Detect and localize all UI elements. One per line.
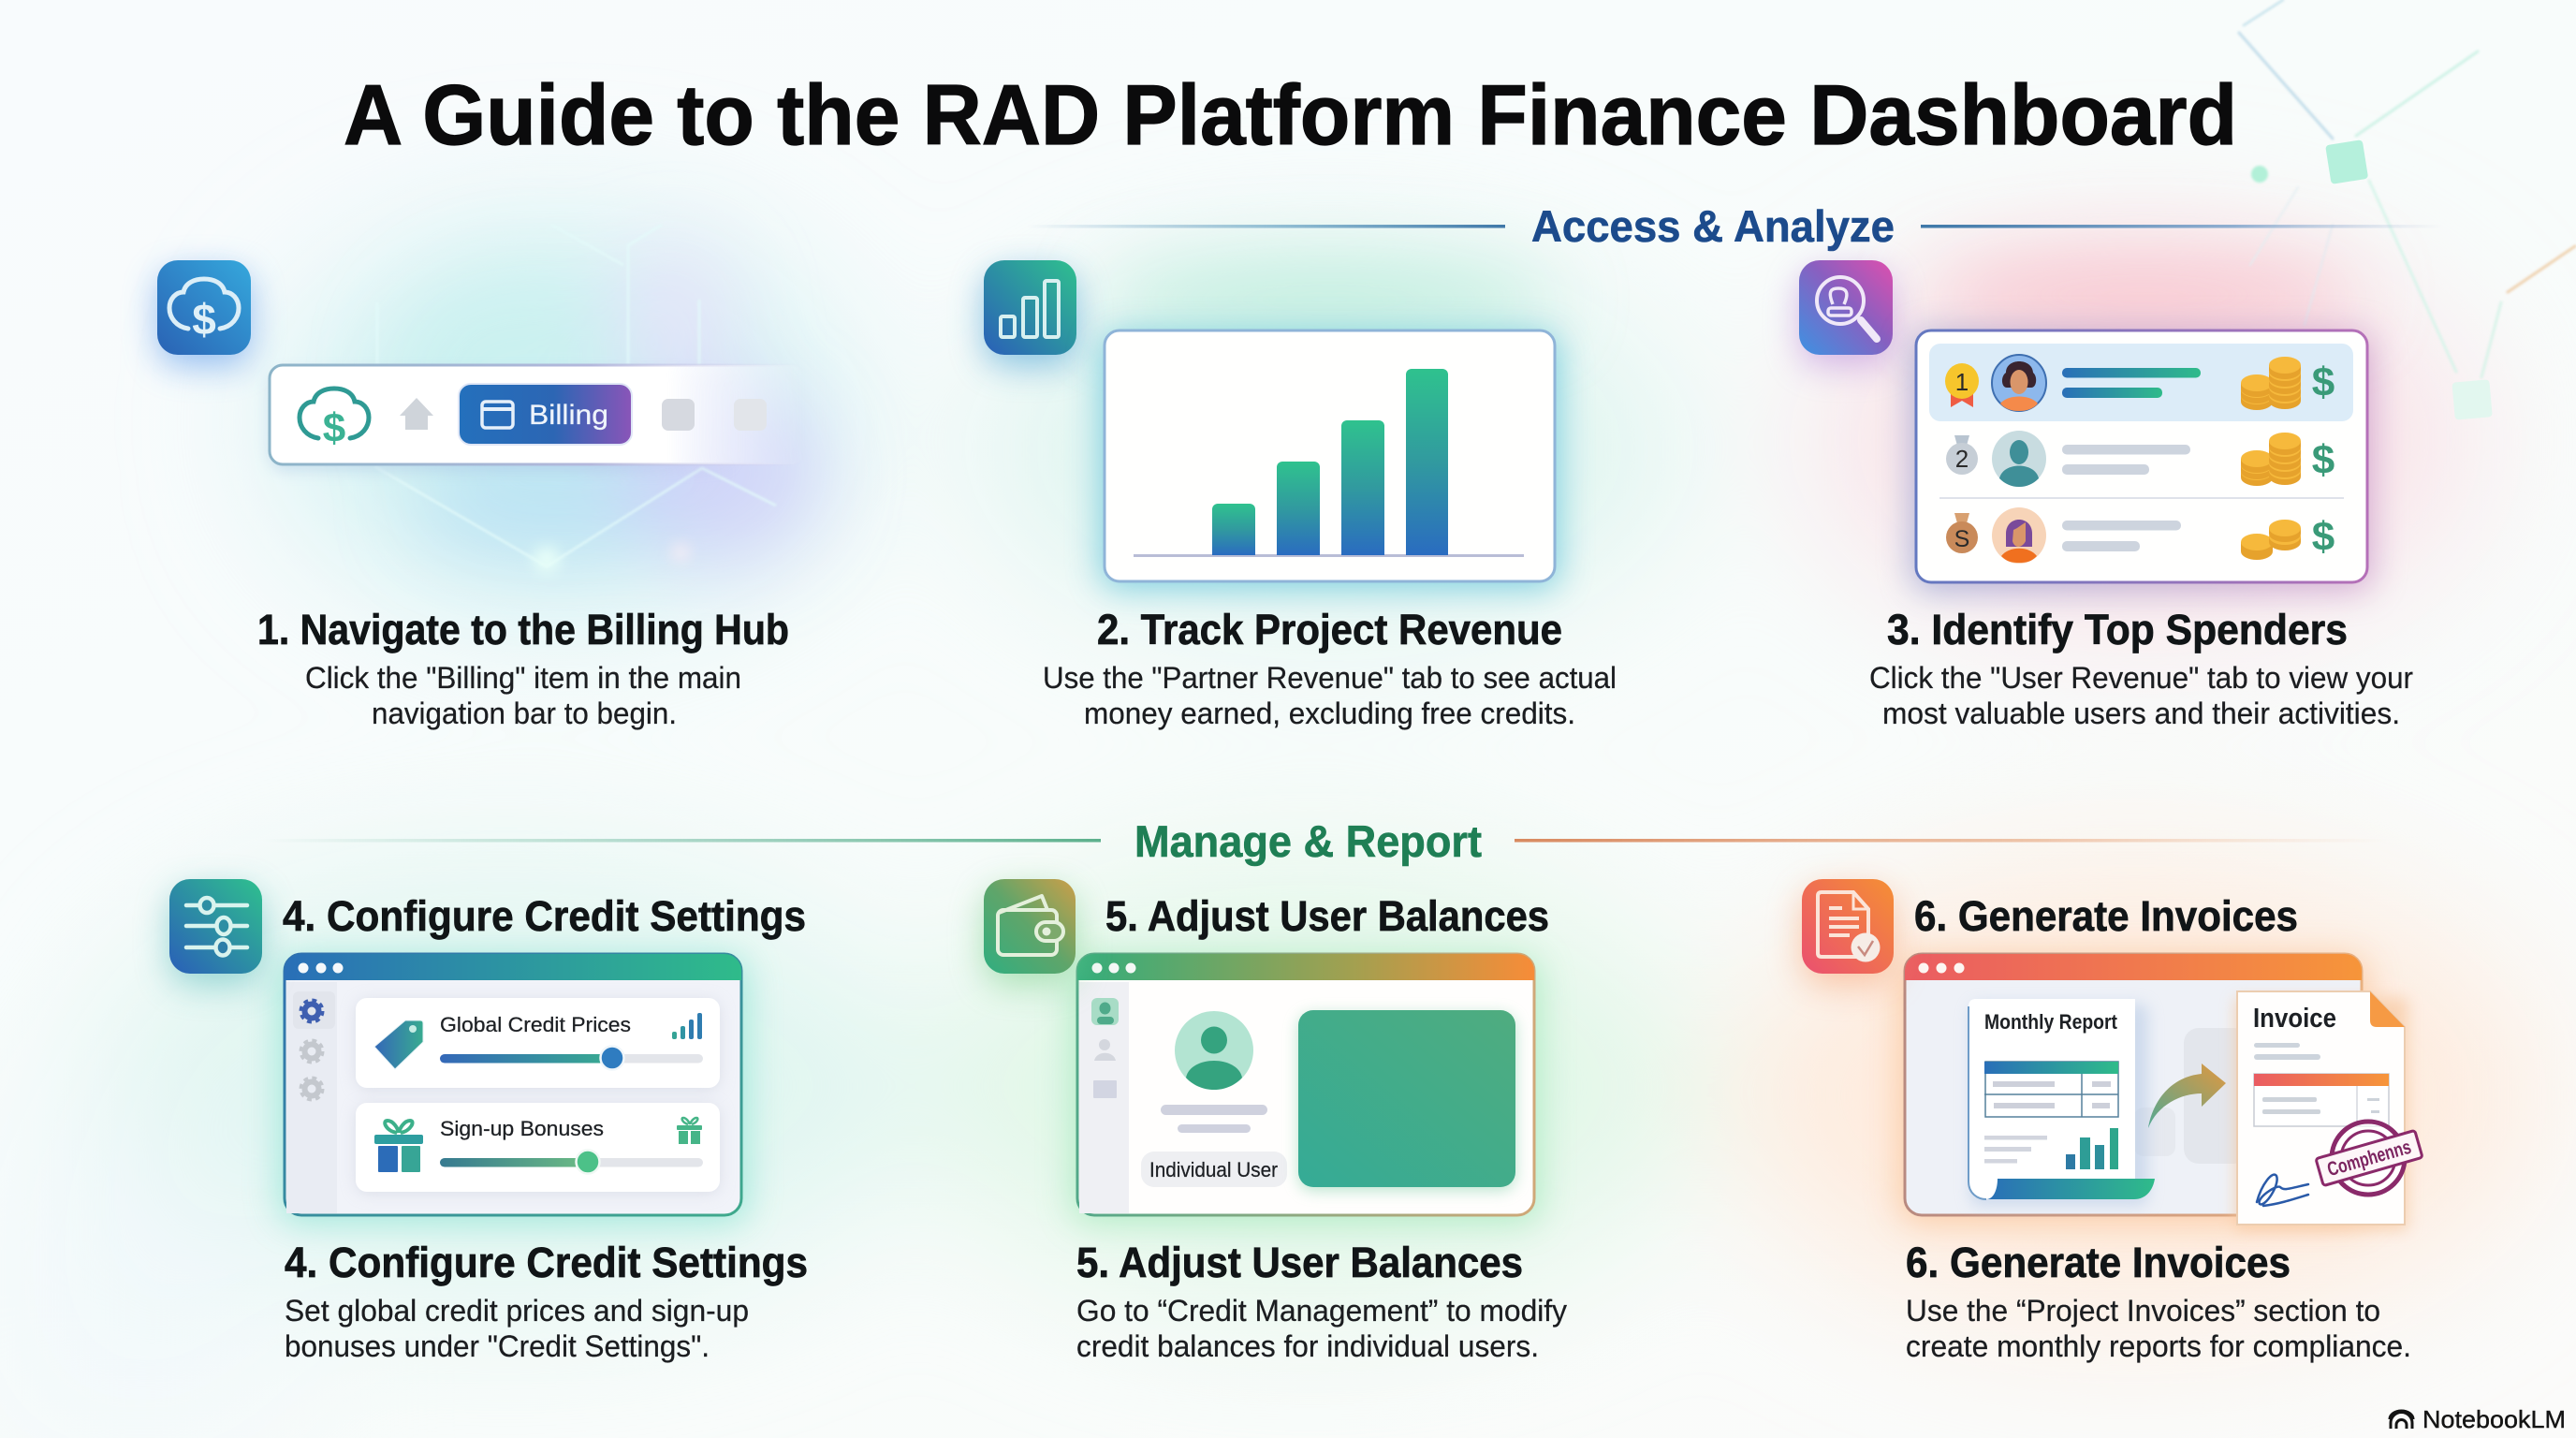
panel: step 6 generate invoices [1802, 879, 2422, 1363]
step 4 description: Set global credit prices and sign-up [285, 1294, 749, 1328]
nav placeholder items [662, 399, 767, 431]
step 2 description: money earned, excluding free credits. [1084, 697, 1575, 730]
sidebar gear icons [301, 1001, 322, 1099]
arrow [2148, 1064, 2226, 1128]
user leaderboard card [1912, 330, 2373, 591]
row 3 spender: S [1954, 526, 1969, 552]
step 1 description [305, 661, 741, 730]
step 6 description [1906, 1294, 2411, 1363]
icon: document check [1802, 879, 1894, 985]
row 2 spender: $ [2312, 437, 2334, 483]
navigation bar mock-up [270, 365, 805, 470]
step 6 heading: 6. Generate Invoices [1906, 1239, 2291, 1286]
step 2 description: Use the "Partner Revenue" tab to see actual [1043, 661, 1617, 695]
title: A Guide to the RAD Platform Finance Dashboard [344, 68, 2237, 163]
row 1 top spender: $ [2312, 360, 2334, 405]
row 1 top spender: 1 [1955, 368, 1969, 396]
step 4 top heading: 4. Configure Credit Settings [283, 892, 806, 940]
Monthly Report page: Monthly Report [1984, 1010, 2118, 1034]
step 6 top heading: 6. Generate Invoices [1914, 892, 2298, 940]
Invoice document [2235, 991, 2422, 1230]
step 6 description: Use the “Project Invoices” section to [1906, 1294, 2380, 1328]
step 5 description: Go to “Credit Management” to modify [1076, 1294, 1568, 1328]
compliance stamp: Comphenns [2325, 1137, 2414, 1181]
step 3 description [1869, 661, 2413, 730]
panel: step 2 track project revenue [984, 260, 1617, 730]
step 5 heading: 5. Adjust User Balances [1076, 1239, 1523, 1286]
step 1 description: Click the "Billing" item in the main [305, 661, 741, 695]
settings window mock-up [279, 954, 747, 1223]
icon: cloud dollar: $ [192, 295, 216, 344]
report chart [2066, 1128, 2118, 1169]
section heading: Access & Analyze: Access & Analyze [1531, 201, 1895, 251]
Monthly Report page [1969, 999, 2155, 1206]
nav cloud logo: $ [323, 405, 345, 451]
panel: step 3 identify top spenders [1799, 260, 2413, 730]
bars [1212, 369, 1448, 555]
step 3 heading: 3. Identify Top Spenders [1887, 606, 2348, 653]
invoices window mock-up [1899, 954, 2367, 1223]
panel: step 4 configure credit settings [169, 879, 808, 1363]
step 4 heading: 4. Configure Credit Settings [285, 1239, 808, 1286]
step 4 description [285, 1294, 749, 1363]
row 3 spender: $ [2312, 514, 2334, 560]
Individual User label: Individual User [1149, 1158, 1278, 1181]
revenue chart card [1101, 330, 1559, 588]
section heading: Manage & Report: Manage & Report [1134, 816, 1482, 866]
step 5 description: credit balances for individual users. [1076, 1329, 1539, 1363]
Individual User label [1141, 1152, 1287, 1187]
section heading: Manage & Report [262, 816, 2387, 866]
step 4 description: bonuses under "Credit Settings". [285, 1329, 710, 1363]
step 5 description [1076, 1294, 1568, 1363]
step 2 heading: 2. Track Project Revenue [1097, 606, 1562, 653]
Billing button: Billing [529, 400, 608, 431]
step 6 description: create monthly reports for compliance. [1906, 1329, 2411, 1363]
icon: user search [1799, 260, 1893, 366]
balance panel [1298, 1010, 1515, 1191]
section heading: Access & Analyze [1027, 201, 2443, 251]
Invoice document: Invoice [2253, 1004, 2336, 1034]
step 2 description [1043, 661, 1617, 730]
Global Credit Prices card: Global Credit Prices [440, 1013, 631, 1036]
invoice table [2254, 1074, 2389, 1126]
icon: wallet [984, 879, 1076, 985]
compliance stamp [2316, 1122, 2422, 1195]
row 2 spender: 2 [1955, 445, 1969, 473]
step 1 heading: 1. Navigate to the Billing Hub [257, 606, 789, 653]
sidebar items [1091, 998, 1119, 1098]
row 2 spender [1946, 431, 2334, 487]
step 1 description: navigation bar to begin. [372, 697, 677, 730]
Sign-up Bonuses card [356, 1103, 720, 1194]
Sign-up Bonuses card: Sign-up Bonuses [440, 1117, 604, 1140]
user balance window mock-up [1072, 954, 1540, 1223]
panel: step 1 navigate to the billing hub [157, 260, 805, 730]
step 5 top heading: 5. Adjust User Balances [1105, 892, 1549, 940]
row 3 spender [1946, 507, 2334, 564]
panel: step 5 adjust user balances [984, 879, 1568, 1363]
icon: sliders [169, 879, 262, 985]
user avatar [1175, 1011, 1253, 1090]
step 3 description: most valuable users and their activities. [1882, 697, 2400, 730]
report table [1984, 1062, 2118, 1117]
signature [2257, 1175, 2308, 1206]
icon: bar chart [984, 260, 1076, 366]
nav cloud logo [300, 389, 369, 451]
Global Credit Prices card [356, 998, 720, 1090]
Billing button [459, 384, 632, 445]
NotebookLM watermark: NotebookLM [2422, 1405, 2566, 1433]
nav home icon [400, 398, 433, 430]
row 1 top spender [1929, 344, 2353, 421]
step 3 description: Click the "User Revenue" tab to view your [1869, 661, 2413, 695]
icon: cloud dollar [157, 260, 251, 366]
